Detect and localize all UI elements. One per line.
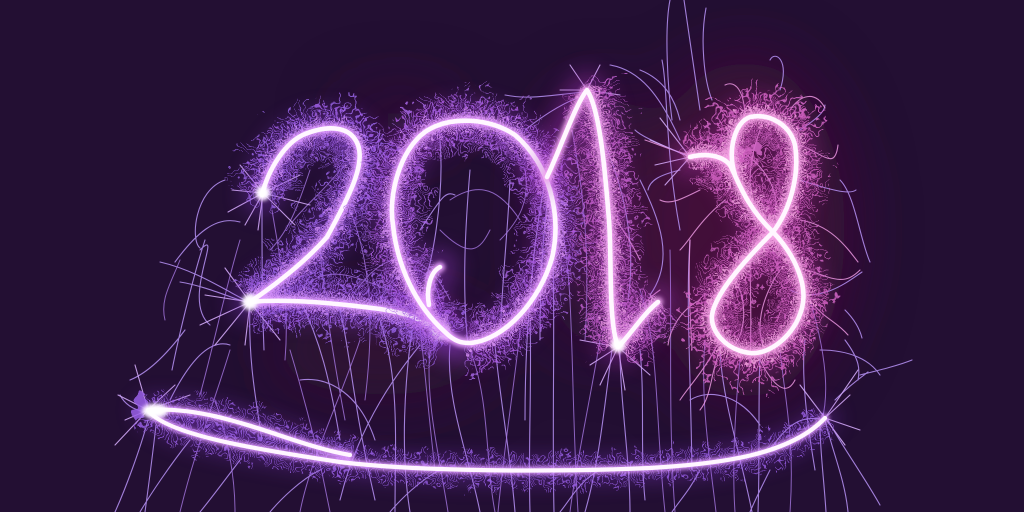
background: reddish haze behind the numerals: [270, 60, 845, 400]
sparks: bursts at stroke ends: [115, 65, 860, 445]
spark head glow: [242, 186, 449, 339]
numeral: 2: [242, 128, 449, 339]
spark head glow: [142, 404, 168, 418]
falling sparks: long thin trails: [115, 0, 912, 512]
spark head glow: [611, 338, 625, 352]
sparks: pink trails around the eight: [600, 84, 860, 410]
numeral: 8: [690, 116, 803, 353]
numeral: 1: [547, 90, 658, 352]
numeral: 0: [392, 121, 555, 343]
falling sparks: denser secondary trails: [164, 130, 826, 512]
underline flourish: [142, 404, 825, 470]
